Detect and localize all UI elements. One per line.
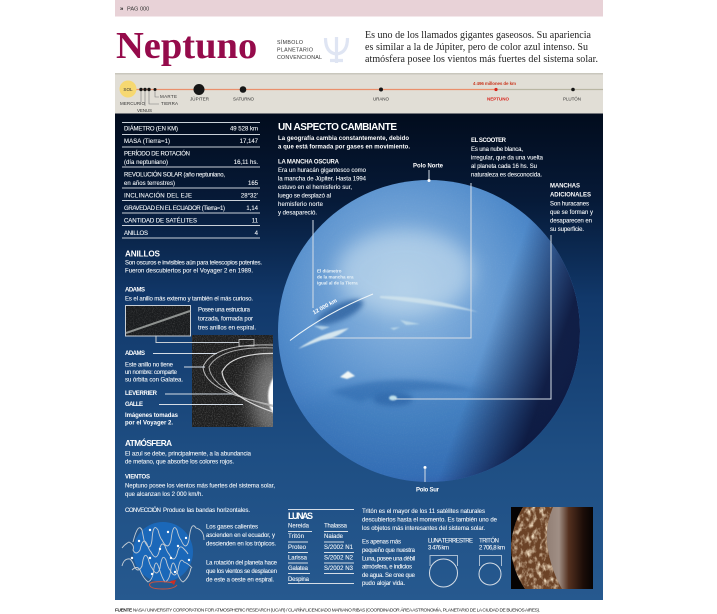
moons list	[288, 510, 354, 584]
callout: manchas adicionales	[395, 184, 593, 399]
title: Neptuno	[116, 25, 257, 67]
rings section text: Son oscuros e invisibles aún para telescopios potentes.	[125, 260, 262, 266]
callout: polo sur: Polo Sur	[416, 488, 440, 494]
facts table: (día neptuniano)	[124, 160, 168, 166]
intro text: es similar a la de Júpiter, pero de color azul intenso. Su	[365, 42, 588, 53]
callout: manchas adicionales: desaparecen en	[550, 218, 592, 224]
ring labels: Imágenes tomadas	[125, 413, 179, 419]
planetary symbol: PLANETARIO	[277, 48, 313, 54]
callout: la mancha oscura	[278, 160, 367, 308]
atmosphere section: Produce las bandas horizontales.	[163, 508, 250, 514]
intro text: Es uno de los llamados gigantes gaseosos. Su apariencia	[365, 30, 592, 41]
facts table: CANTIDAD DE SATÉLITES	[124, 218, 197, 224]
callout: diameter of dark spot	[290, 268, 373, 340]
callout: la mancha oscura: hemisferio norte	[278, 202, 324, 208]
triton text: Tritón es el mayor de los 11 satélites naturales	[362, 509, 485, 515]
moons list: Despina	[288, 577, 310, 583]
moon size comparison	[428, 538, 505, 587]
rings section text: Es el anillo más externo y también el más curioso.	[125, 296, 253, 302]
ring labels: ADAMS	[125, 351, 145, 357]
atmosphere section: que alcanzan los 2 000 km/h.	[125, 492, 203, 498]
solar system distance strip: PLUTÓN	[563, 96, 581, 102]
moons list: Naiade	[324, 534, 344, 540]
callout: diameter of dark spot: El diámetro	[317, 268, 342, 274]
callout: diameter of dark spot: de la mancha era	[317, 274, 354, 280]
callout: manchas adicionales: ADICIONALES	[550, 192, 591, 198]
convection note: ascienden en el ecuador, y	[206, 533, 275, 539]
callout: polo sur	[416, 466, 440, 494]
solar system distance strip	[115, 73, 603, 114]
moons list: S/2002 N3	[324, 566, 354, 572]
callout: el scooter: irregular, que da una vuelta	[471, 156, 544, 162]
atmosphere section: de metano, que absorbe los colores rojos.	[125, 460, 234, 466]
callout: la mancha oscura: la mancha de Júpiter. Hasta 1994	[278, 176, 367, 182]
callout: el scooter: EL SCOOTER	[471, 138, 507, 144]
convection diagram	[122, 522, 204, 589]
icon: trident	[326, 37, 348, 63]
facts table: 17,147	[240, 139, 259, 145]
solar system distance strip: SATURNO	[233, 96, 254, 102]
moons list: Thalassa	[324, 524, 348, 530]
ring labels: su órbita con Galatea.	[125, 378, 183, 384]
callout: polo norte	[413, 164, 444, 182]
facts table: INCLINACIÓN DEL EJE	[124, 192, 192, 200]
solar system distance strip: JÚPITER	[190, 96, 210, 102]
facts table: MASA (Tierra=1)	[124, 139, 170, 145]
page reference bar	[115, 0, 603, 16]
facts table: 28°32’	[241, 194, 258, 200]
page reference bar: PAG 000	[127, 6, 149, 12]
planetary symbol: CONVENCIONAL	[277, 55, 322, 61]
moons list: Larissa	[288, 556, 308, 562]
heading: un aspecto cambiante: a que está formada por gases en movimiento.	[278, 144, 410, 150]
ring labels: Este anillo no tiene	[125, 362, 174, 368]
planetary symbol: SÍMBOLO	[277, 39, 303, 46]
facts table	[122, 122, 260, 238]
callout: la mancha oscura: luego se desplazó al	[278, 194, 331, 200]
solar system distance strip: VENUS	[137, 108, 152, 113]
facts table: DIÁMETRO (EN KM)	[124, 126, 178, 132]
solar system distance strip: TIERRA	[161, 101, 178, 106]
convection note: descienden en los trópicos.	[206, 542, 276, 548]
triton text: pudo alojar vida.	[362, 581, 405, 587]
atmosphere section: CONVECCIÓN	[125, 507, 161, 514]
callout: el scooter: naturaleza es desconocida.	[471, 172, 542, 178]
solar system distance strip: 4 496 millones de km	[473, 81, 516, 86]
solar system distance strip: NEPTUNO	[487, 96, 509, 102]
callout: manchas adicionales: Son huracanes	[550, 202, 589, 208]
moons list: Proteo	[288, 545, 307, 551]
atmosphere section: El azul se debe, principalmente, a la abundancia	[125, 452, 252, 458]
triton text: Luna, posee una débil	[362, 556, 415, 562]
heading: un aspecto cambiante	[278, 122, 410, 150]
planetary symbol	[277, 37, 348, 63]
callout: diameter of dark spot: 12 000 km	[312, 298, 338, 316]
facts table: PERÍODO DE ROTACIÓN	[124, 150, 190, 158]
triton text: los objetos más interesantes del sistema solar.	[362, 526, 485, 532]
callout: la mancha oscura: Era un huracán gigantesco como	[278, 168, 367, 174]
callout: la mancha oscura: estuvo en el hemisferio sur,	[278, 185, 352, 191]
solar system distance strip: URANO	[373, 96, 389, 102]
triton text: pequeño que nuestra	[362, 548, 416, 554]
moons list: LUNAS	[288, 511, 313, 521]
callout: el scooter	[327, 138, 544, 338]
moons list: S/2002 N2	[324, 556, 354, 562]
atmosphere section: VIENTOS	[125, 474, 150, 480]
callout: la mancha oscura: y desapareció.	[278, 210, 317, 216]
ring labels: GALLE	[125, 402, 143, 408]
ring labels: LEVERRIER	[125, 391, 158, 397]
planet Neptune	[278, 178, 580, 484]
callout: diameter of dark spot: igual al de la Tierra	[317, 280, 358, 286]
heading: un aspecto cambiante: UN ASPECTO CAMBIANTE	[278, 122, 397, 133]
solar system distance strip: SOL	[123, 87, 133, 92]
atmosphere section: Neptuno posee los vientos más fuertes del sistema solar,	[125, 484, 275, 490]
moons list: Nereida	[288, 524, 310, 530]
callout: la mancha oscura: LA MANCHA OSCURA	[278, 160, 340, 166]
source credit: FUENTE NASA / UNIVERSITY CORPORATION FOR ATMOSPHERIC RESEARCH (UCAR) / CLARÍN/ LICENCIADO MARIANO RIBAS (COORDINADOR ÁREA ASTRONOMÍA, PLANETARIO DE LA CIUDAD DE BUENOS AIRES).	[115, 606, 540, 614]
main dark panel	[115, 114, 603, 600]
moons list: Tritón	[288, 534, 304, 540]
callout: polo norte: Polo Norte	[413, 164, 444, 170]
triton text	[362, 509, 498, 587]
callout: el scooter: al planeta cada 16 hs. Su	[471, 164, 537, 170]
intro text: atmósfera posee los vientos más fuertes del sistema solar.	[365, 54, 598, 65]
facts table: GRAVEDAD EN EL ECUADOR (Tierra=1)	[124, 206, 225, 212]
Adams ring note: torzada, formada por	[198, 316, 253, 322]
solar system distance strip: MERCURIO	[120, 101, 145, 106]
convection note: que los vientos se desplacen	[206, 569, 277, 575]
heading: un aspecto cambiante: La geografía cambia constantemente, debido	[278, 136, 409, 142]
triton text: Es apenas más	[362, 540, 401, 546]
facts table: 1,14	[246, 206, 259, 212]
facts table: 16,11 hs.	[234, 160, 258, 166]
convection note: La rotación del planeta hace	[206, 560, 278, 566]
intro text	[365, 30, 598, 65]
facts table: 11	[252, 218, 259, 224]
ring labels	[125, 351, 243, 426]
atmosphere section: ATMÓSFERA	[125, 437, 172, 448]
triton text: descubiertos hasta el momento. Es también uno de	[362, 518, 498, 524]
moon size comparison: 3 476 km	[428, 546, 449, 552]
convection note: Los gases calientes	[206, 524, 258, 530]
photo: Adams ring detail	[126, 306, 190, 336]
rings section text: ANILLOS	[125, 250, 161, 258]
Adams ring note: tres anillos en espiral.	[198, 326, 256, 332]
facts table: ANILLOS	[124, 231, 148, 237]
solar system distance strip: MARTE	[160, 94, 177, 99]
moon size comparison: LUNA TERRESTRE	[428, 538, 473, 544]
page reference bar: »	[120, 6, 124, 12]
facts table: 165	[248, 181, 259, 187]
callout: manchas adicionales: su superficie.	[550, 227, 584, 233]
moon size comparison: TRITÓN	[479, 538, 499, 544]
facts table: 49 528 km	[230, 126, 258, 132]
triton text: de agua. Se cree que	[362, 573, 416, 579]
photo: Triton	[511, 507, 593, 589]
triton text: atmósfera, e indicios	[362, 564, 412, 570]
facts table: en años terrestres)	[124, 181, 175, 187]
moon size comparison: 2 706,8 km	[479, 546, 505, 552]
callout: el scooter: Es una nube blanca,	[471, 147, 523, 153]
ring labels: por el Voyager 2.	[125, 420, 173, 426]
rings section text: Fueron descubiertos por el Voyager 2 en 1989.	[125, 268, 253, 274]
ring labels: un nombre: comparte	[125, 370, 178, 376]
rings section text: ADAMS	[125, 288, 145, 294]
Adams ring note: Posee una estructura	[198, 308, 251, 314]
callout: manchas adicionales: que se forman y	[550, 210, 593, 216]
moons list: S/2002 N1	[324, 545, 354, 551]
callout: manchas adicionales: MANCHAS	[550, 184, 580, 190]
convection note: de este a oeste en espiral.	[206, 578, 274, 584]
convection note	[206, 524, 278, 584]
moons list: Galatea	[288, 566, 309, 572]
facts table: 4	[255, 231, 259, 237]
photo: Neptune rings	[156, 335, 273, 427]
atmosphere section	[125, 437, 275, 514]
Adams ring note	[198, 308, 256, 332]
rings section text	[125, 250, 262, 302]
facts table: REVOLUCIÓN SOLAR (año neptuniano,	[124, 172, 225, 178]
